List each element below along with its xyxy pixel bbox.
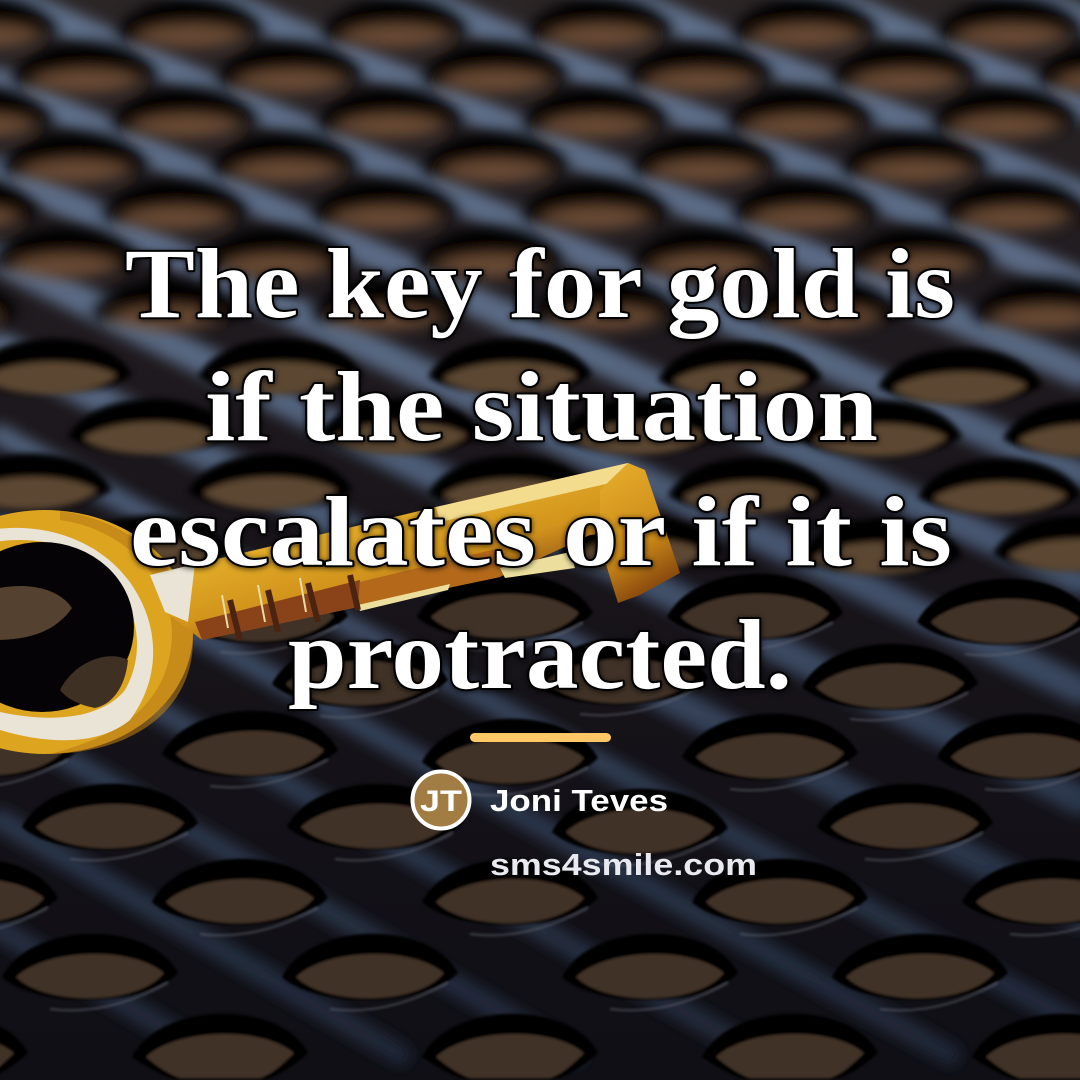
- quote line 2: if the situation: [205, 351, 878, 462]
- quote line 1: The key for gold is: [125, 228, 955, 339]
- website: sms4smile.com: [490, 847, 757, 882]
- accent divider bar: [470, 733, 611, 742]
- author avatar: JT: [420, 785, 462, 818]
- key ring: [0, 510, 193, 754]
- quote line 4: protracted.: [288, 599, 792, 710]
- key bit: [600, 463, 680, 603]
- golden key: [0, 463, 680, 754]
- author avatar: [412, 772, 470, 828]
- key shaft: [150, 463, 640, 640]
- author name: Joni Teves: [490, 783, 668, 818]
- quote text: [125, 228, 955, 710]
- quote line 3: escalates or if it is: [130, 476, 952, 587]
